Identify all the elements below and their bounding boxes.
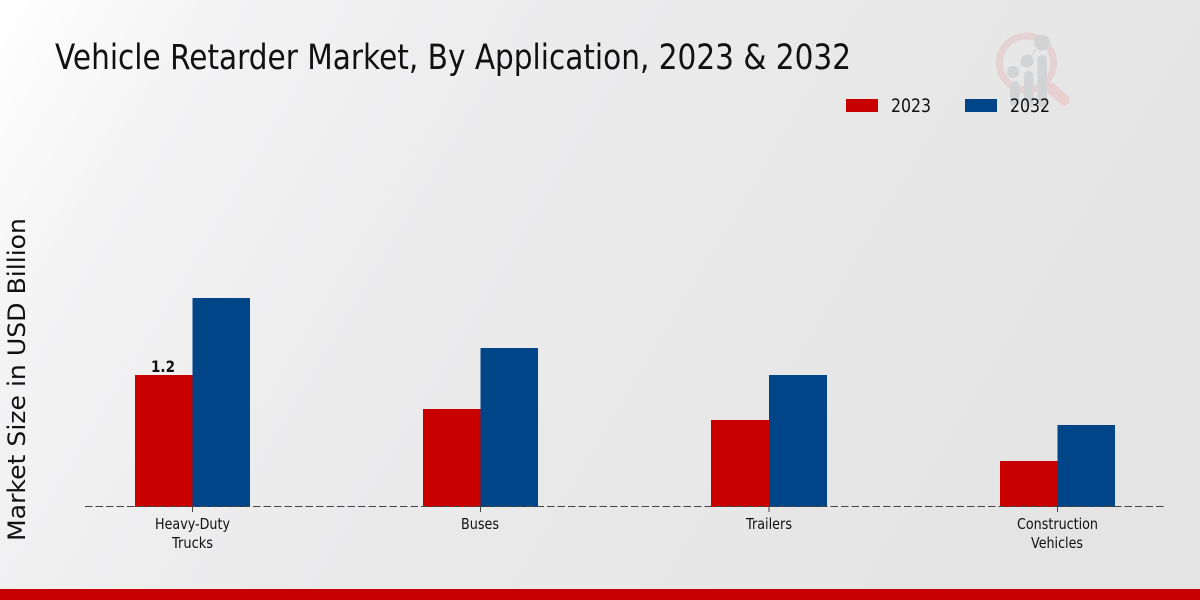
bars: Heavy-Duty Trucks [135, 298, 250, 507]
legend item: 2023: 2023 [891, 95, 931, 117]
legend item: 2032: 2032 [1010, 95, 1050, 117]
bars: Trailers [711, 375, 827, 507]
x axis label: Heavy-Duty Trucks: Heavy-Duty [155, 515, 230, 533]
x axis label: Heavy-Duty Trucks [155, 515, 230, 552]
title: Vehicle Retarder Market, By Application, 2023 & 2032 [55, 38, 851, 78]
bars: Construction Vehicles [1000, 425, 1115, 507]
icon: watermark logo [1000, 34, 1064, 107]
y axis label: Market Size in USD Billion [3, 218, 31, 541]
legend [846, 95, 1050, 117]
x axis label: Construction Vehicles: Construction [1017, 515, 1098, 533]
x axis label: Construction Vehicles: Vehicles [1031, 534, 1083, 552]
x axis label: Heavy-Duty Trucks: Trucks [171, 534, 213, 552]
x axis label: Construction Vehicles [1017, 515, 1098, 552]
footer bar [0, 589, 1200, 600]
legend item: 2032 [965, 95, 1050, 117]
legend item: 2023 [846, 95, 931, 117]
bar chart [85, 298, 1164, 512]
x axis label: Buses: Buses [461, 515, 499, 533]
x axis label: Trailers: Trailers [745, 515, 792, 533]
value label: 1.2: 1.2 [151, 357, 175, 376]
bars: Buses [423, 348, 538, 507]
